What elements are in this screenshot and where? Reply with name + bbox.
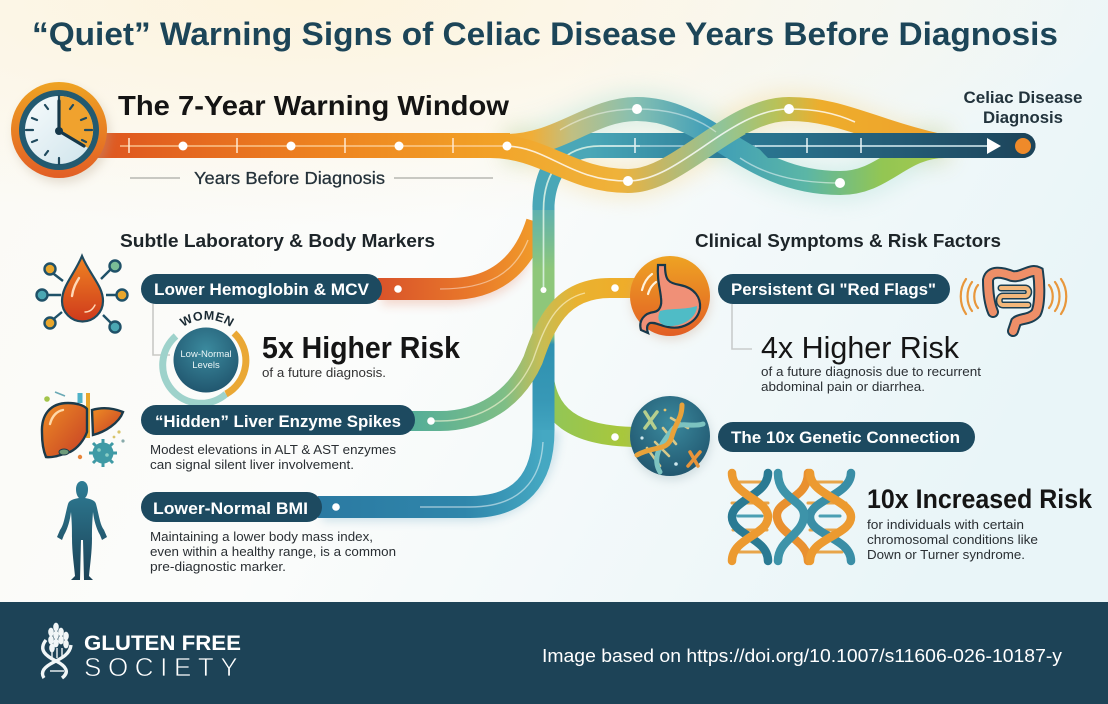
logo text: GLUTEN FREE: [84, 631, 241, 655]
pathway: lower-normal BMI: [318, 430, 544, 507]
stat: 10x increased risk: Down or Turner syndrome.: [867, 547, 1025, 562]
logo text: [84, 631, 244, 682]
logo text: SOCIETY: [84, 652, 244, 682]
stat: 5x higher risk: of a future diagnosis.: [262, 365, 386, 380]
stat: 10x increased risk: [867, 484, 1093, 562]
panel: laboratory and body markers: [35, 231, 461, 580]
badge: women low-normal levels: [159, 310, 250, 405]
panel: clinical symptoms and risk factors: [630, 231, 1093, 562]
connecting pathways: [318, 109, 950, 514]
timeline: orange bar: [95, 133, 512, 158]
pill: lower-normal BMI: Lower-Normal BMI: [153, 500, 308, 518]
icon: genetic circle: [630, 396, 711, 480]
text: liver description: Modest elevations in ALT & AST enzymes: [150, 442, 397, 457]
intertwined strands: [490, 109, 945, 183]
badge: women low-normal levels: WOMEN: [179, 310, 234, 326]
title: “Quiet” Warning Signs of Celiac Disease Years Before Diagnosis: [32, 16, 1058, 52]
pathway: hemoglobin: [378, 222, 537, 289]
label: celiac disease diagnosis: Diagnosis: [983, 109, 1063, 127]
icon: clock: [11, 82, 110, 183]
text: BMI description: [150, 529, 396, 574]
pathway: 10x genetic: [543, 370, 640, 437]
footer band: [0, 602, 1108, 704]
timeline: later bar to diagnosis: [532, 133, 1036, 290]
stat: 5x higher risk: 5x Higher Risk: [262, 330, 461, 365]
badge: women low-normal levels: Low-Normal: [180, 349, 232, 360]
stat: 4x higher risk: 4x Higher Risk: [761, 330, 959, 365]
pill: lower hemoglobin: [141, 274, 382, 304]
pathway: central vertical: [532, 205, 554, 431]
logo: wheat and DNA: [42, 623, 71, 678]
pill: liver enzymes: “Hidden” Liver Enzyme Spikes: [155, 413, 401, 431]
heading: warning window: The 7-Year Warning Window: [118, 90, 509, 121]
text: BMI description: Maintaining a lower body mass index,: [150, 529, 373, 544]
timeline: bar end over strands: [745, 133, 1036, 158]
icon: liver: [42, 392, 125, 467]
pill: genetic connection: [718, 422, 975, 452]
pill: liver enzymes: [141, 405, 415, 435]
text: liver description: [150, 442, 397, 472]
pill: lower-normal BMI: [141, 492, 322, 522]
text: liver description: can signal silent liver involvement.: [150, 457, 354, 472]
source credit: Image based on https://doi.org/10.1007/s11606-026-10187-y: [542, 646, 1062, 666]
pathway: liver enzymes: [410, 288, 640, 421]
text: BMI description: pre-diagnostic marker.: [150, 559, 286, 574]
pill: persistent GI red flags: Persistent GI "Red Flags": [731, 281, 936, 299]
label: celiac disease diagnosis: [964, 89, 1082, 127]
heading: clinical symptoms: Clinical Symptoms & Risk Factors: [695, 231, 1001, 251]
pill: genetic connection: The 10x Genetic Connection: [731, 429, 960, 447]
icon: triple DNA helix: [732, 473, 851, 561]
heading: laboratory markers: Subtle Laboratory & Body Markers: [120, 231, 435, 251]
stat: 4x higher risk: of a future diagnosis due to recurrent: [761, 364, 981, 379]
strand: orange: [490, 109, 940, 181]
icon: blood drop network: [36, 256, 128, 332]
icon: intestine: [961, 271, 1066, 331]
icon: stomach: [630, 256, 711, 340]
arrow head: [987, 138, 1001, 154]
stat: 5x higher risk: [262, 330, 461, 380]
stat: 10x increased risk: chromosomal conditions like: [867, 532, 1038, 547]
stat: 4x higher risk: abdominal pain or diarrhea.: [761, 379, 925, 394]
stat: 10x increased risk: 10x Increased Risk: [867, 484, 1093, 514]
strand dots: [623, 104, 845, 188]
axis label: years before diagnosis: Years Before Diagnosis: [194, 168, 385, 188]
text: BMI description: even within a healthy range, is a common: [150, 544, 396, 559]
endpoint dot: [1015, 138, 1031, 154]
strand: teal: [505, 109, 945, 183]
icon: human body: [57, 481, 107, 580]
stat: 4x higher risk: [761, 330, 981, 394]
stat: 10x increased risk: for individuals with certain: [867, 517, 1024, 532]
badge: women low-normal levels: Levels: [192, 360, 220, 371]
pill: lower hemoglobin: Lower Hemoglobin & MCV: [154, 281, 369, 299]
label: celiac disease diagnosis: Celiac Disease: [964, 89, 1082, 107]
pill: persistent GI red flags: [718, 274, 950, 304]
